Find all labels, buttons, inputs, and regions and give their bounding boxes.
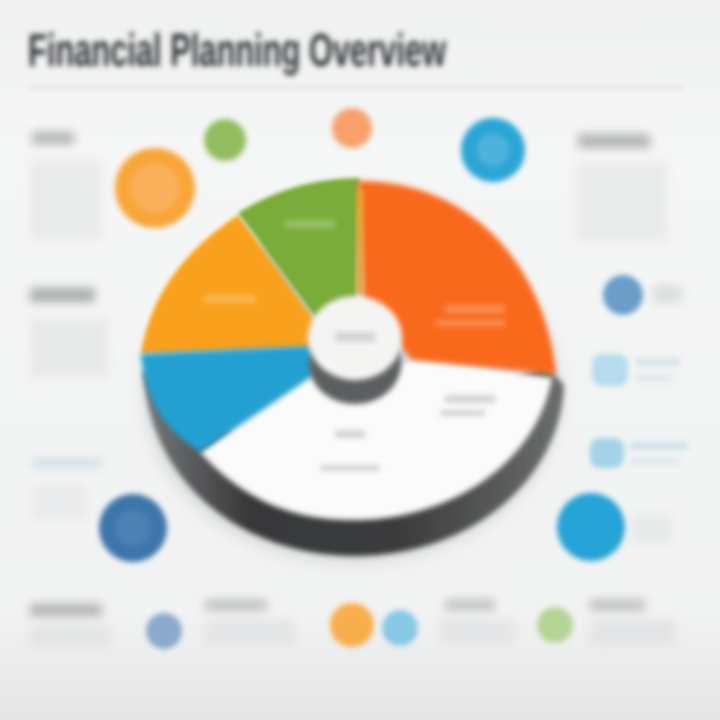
segment labels: [205, 220, 505, 326]
hub label: [335, 332, 375, 342]
icon: green circle: [204, 119, 246, 161]
icon: bottom green circle: [537, 607, 573, 643]
icon: bottom steel circle: [146, 613, 182, 649]
text block: right beside large circle: [632, 515, 672, 543]
text block: right beside steel circle: [652, 285, 682, 303]
icon: large blue circle: [557, 493, 625, 561]
title: Financial Planning Overview: [28, 24, 446, 76]
orange segment: [358, 181, 556, 374]
icon: small orange circle: [332, 108, 372, 148]
white segment: [200, 358, 552, 520]
subtitle: [30, 84, 685, 90]
blue segment: [141, 346, 314, 452]
text block: bottom column 2: [205, 600, 295, 646]
icon: dark blue circle: [99, 494, 167, 562]
green segment: [238, 178, 360, 318]
pie dark rim: [143, 365, 564, 556]
icon: steel blue circle: [603, 275, 643, 315]
icon: bottom amber circle: [330, 603, 374, 647]
icon: orange circle: [115, 148, 195, 228]
text block: middle left: [30, 288, 108, 378]
text block: lower left: [32, 458, 102, 520]
icon: light blue badge lower: [590, 438, 624, 468]
icon: light blue badge upper: [592, 354, 628, 386]
text block: upper right: [576, 134, 668, 242]
seam highlight: [356, 190, 364, 295]
text block: bottom column 1: [30, 604, 110, 648]
text block: bottom column 4: [590, 600, 675, 646]
centre hub shadow: [309, 324, 401, 404]
pie chart: [141, 178, 564, 560]
text block: upper left: [30, 132, 102, 240]
centre hub: [308, 296, 402, 380]
text block: bottom column 3: [440, 600, 515, 644]
icon: bottom light blue circle: [382, 610, 418, 646]
text block: right beside lower badge: [630, 442, 688, 465]
text block: right beside upper badge: [636, 358, 680, 382]
white segment labels: [320, 395, 495, 471]
amber segment: [141, 215, 316, 354]
pie shadow: [147, 230, 557, 560]
icon: blue circle: [461, 118, 525, 182]
